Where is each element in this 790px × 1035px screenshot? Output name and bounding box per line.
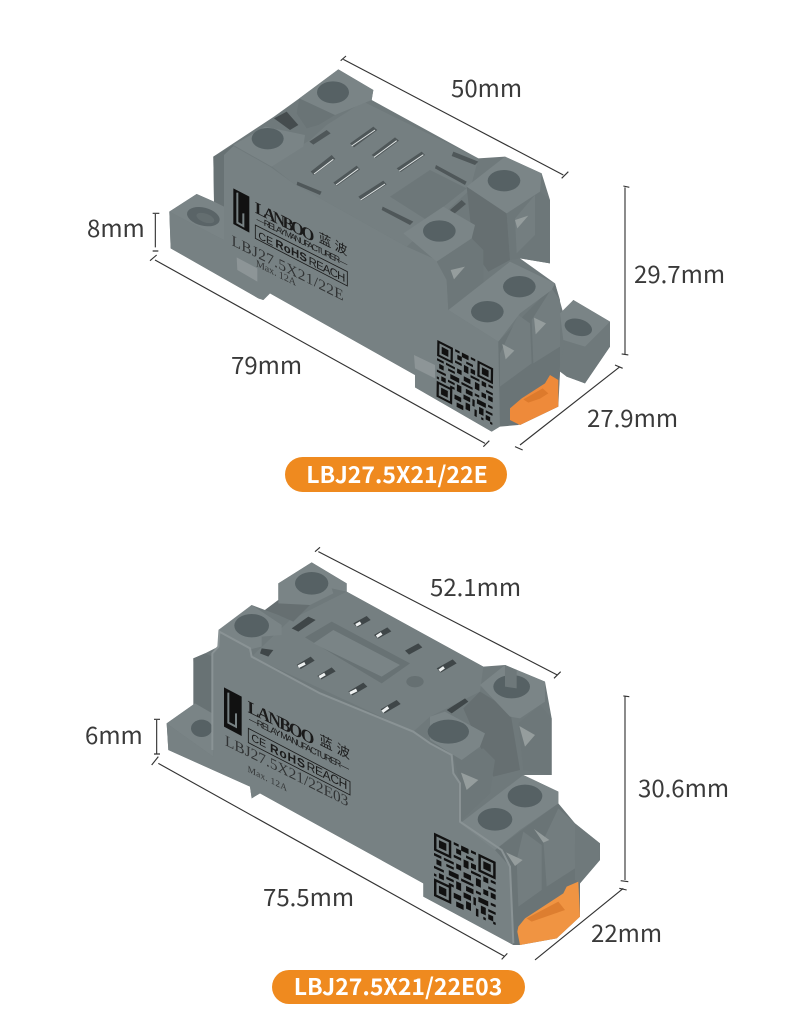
QR code — [436, 340, 493, 425]
label: 75.5mm: 75.5mm — [263, 878, 354, 913]
left mounting foot — [167, 703, 213, 757]
back terminal block — [265, 562, 347, 622]
label: 79mm: 79mm — [231, 346, 302, 381]
product markings: —RELAY MANUFACTURER— — [257, 214, 348, 269]
product markings: 蓝波 — [319, 732, 350, 762]
product markings — [232, 198, 348, 305]
contact slots — [297, 127, 478, 225]
relay 2: LBJ27.5X21/22E03 — [167, 562, 600, 945]
product markings: CE — [258, 230, 274, 249]
left terminal block — [218, 605, 282, 657]
contact slots — [292, 616, 468, 713]
logo mark — [233, 188, 249, 233]
left mounting foot — [169, 194, 224, 240]
label window — [414, 355, 435, 378]
left column — [193, 653, 212, 717]
front right terminal — [428, 712, 495, 822]
lower double terminal — [448, 262, 560, 427]
rear right terminal — [467, 157, 550, 272]
label: 30.6mm: 30.6mm — [638, 769, 729, 804]
left column — [213, 145, 233, 207]
product markings: 蓝波 — [319, 230, 347, 258]
dimension lines: relay 1 — [150, 56, 629, 450]
right mounting foot — [575, 823, 600, 883]
body silhouette — [169, 69, 610, 432]
label: 27.9mm: 27.9mm — [587, 399, 678, 434]
side face and foot front — [169, 146, 500, 432]
window recess — [390, 170, 467, 220]
model pill 1: LBJ27.5X21/22E — [306, 456, 488, 490]
label: 6mm: 6mm — [85, 716, 143, 751]
side face and foot front — [167, 632, 513, 945]
right mounting foot — [559, 300, 610, 383]
label: 22mm: 22mm — [591, 914, 662, 949]
relay 1: LBJ27.5X21/22E — [169, 69, 610, 432]
product markings: Max. 12A — [256, 258, 296, 289]
label: 8mm: 8mm — [87, 209, 145, 244]
lower double terminal — [460, 775, 580, 945]
logo mark — [224, 687, 242, 736]
window recess — [305, 622, 410, 683]
product markings: CE — [251, 732, 267, 751]
product markings: LBJ27.5X21/22E03 — [225, 732, 348, 810]
front right terminal — [403, 207, 483, 310]
orange latch — [517, 882, 580, 945]
label: 29.7mm: 29.7mm — [634, 255, 725, 290]
orange latch — [510, 375, 558, 425]
product markings: LANBOO — [248, 697, 314, 749]
front-left terminal block — [233, 127, 305, 167]
product markings: LBJ27.5X21/22E — [232, 232, 344, 305]
product markings: LANBOO — [255, 198, 314, 246]
top face — [270, 102, 478, 247]
top face — [252, 592, 483, 732]
light edge strip — [212, 632, 513, 943]
rear right terminal — [463, 665, 552, 777]
product markings — [225, 697, 350, 810]
product markings: —RELAY MANUFACTURER— — [249, 714, 349, 775]
back terminal block — [274, 69, 373, 130]
product markings: REACH — [309, 254, 345, 285]
label: 52.1mm: 52.1mm — [430, 568, 521, 603]
label: 50mm: 50mm — [451, 69, 522, 104]
product markings: REACH — [307, 758, 347, 792]
product markings: RoHS — [275, 236, 307, 265]
dimension lines: relay 2 — [152, 547, 629, 960]
model pill 2: LBJ27.5X21/22E03 — [294, 968, 502, 1002]
product markings: RoHS — [270, 740, 305, 772]
body silhouette — [167, 562, 600, 945]
QR code — [434, 833, 496, 925]
product markings: Max. 12A — [248, 764, 288, 795]
